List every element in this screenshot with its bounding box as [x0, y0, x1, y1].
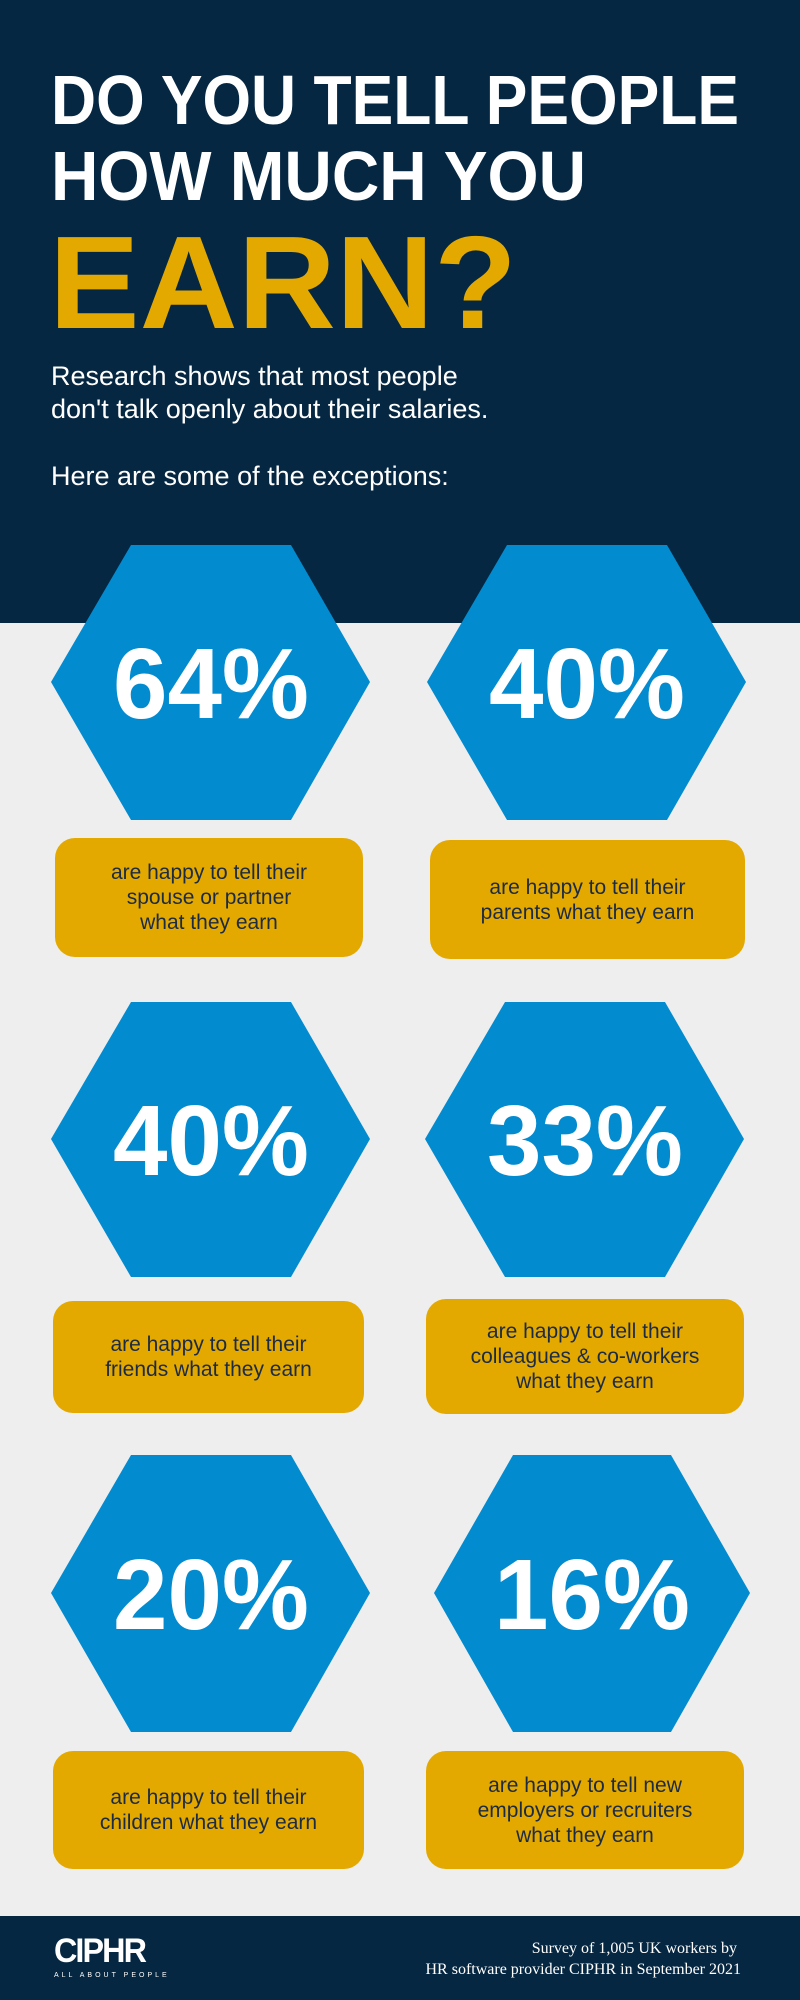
logo: ALL ABOUT PEOPLE — [54, 1972, 170, 1979]
header background — [0, 0, 800, 623]
subtitle — [51, 361, 488, 491]
caption: spouse: are happy to tell their — [111, 861, 307, 884]
subtitle: don't talk openly about their salaries. — [51, 394, 488, 424]
caption: parents: are happy to tell their — [489, 876, 686, 898]
title: EARN? — [49, 209, 517, 356]
caption: children: are happy to tell their — [110, 1786, 307, 1809]
hex 64%: 64% — [113, 628, 309, 740]
hex 16% — [434, 1455, 750, 1732]
caption: spouse: what they earn — [140, 911, 278, 934]
subtitle: Research shows that most people — [51, 361, 458, 391]
caption: employers: are happy to tell new — [488, 1774, 682, 1796]
hex 33%: 33% — [487, 1085, 683, 1197]
caption: children — [53, 1751, 364, 1869]
caption: colleagues: are happy to tell their — [487, 1320, 683, 1343]
logo: CIPHR — [54, 1932, 145, 1970]
subtitle: Here are some of the exceptions: — [51, 461, 449, 491]
caption: friends: friends what they earn — [105, 1358, 312, 1381]
hex 20%: 20% — [113, 1539, 309, 1651]
hex 16%: 16% — [494, 1539, 690, 1651]
hex 40% parents: 40% — [489, 628, 685, 740]
caption: friends — [53, 1301, 364, 1413]
source note: HR software provider CIPHR in September 2021 — [425, 1961, 741, 1978]
caption: colleagues: colleagues & co-workers — [471, 1345, 699, 1368]
caption: parents — [430, 840, 745, 959]
caption: children: children what they earn — [100, 1811, 317, 1834]
caption: spouse: spouse or partner — [127, 886, 291, 909]
title: DO YOU TELL PEOPLE — [51, 61, 739, 139]
caption: colleagues — [426, 1299, 744, 1414]
caption: parents: parents what they earn — [481, 900, 694, 924]
caption: employers: employers or recruiters — [478, 1798, 692, 1822]
logo — [54, 1932, 170, 1979]
hex 20% — [51, 1455, 370, 1732]
hex 33% — [425, 1002, 744, 1277]
footer — [0, 1916, 800, 2000]
title: HOW MUCH YOU — [51, 137, 586, 215]
hex 40% parents — [427, 545, 746, 820]
caption: employers: what they earn — [516, 1824, 654, 1846]
source note — [425, 1940, 741, 1978]
title — [49, 61, 739, 356]
hex 40% friends: 40% — [113, 1085, 309, 1197]
caption: spouse — [55, 838, 363, 957]
caption: colleagues: what they earn — [516, 1370, 654, 1393]
caption: friends: are happy to tell their — [110, 1333, 307, 1356]
hex 64% — [51, 545, 370, 820]
source note: Survey of 1,005 UK workers by — [532, 1940, 737, 1957]
hex 40% friends — [51, 1002, 370, 1277]
caption: employers — [426, 1751, 744, 1869]
